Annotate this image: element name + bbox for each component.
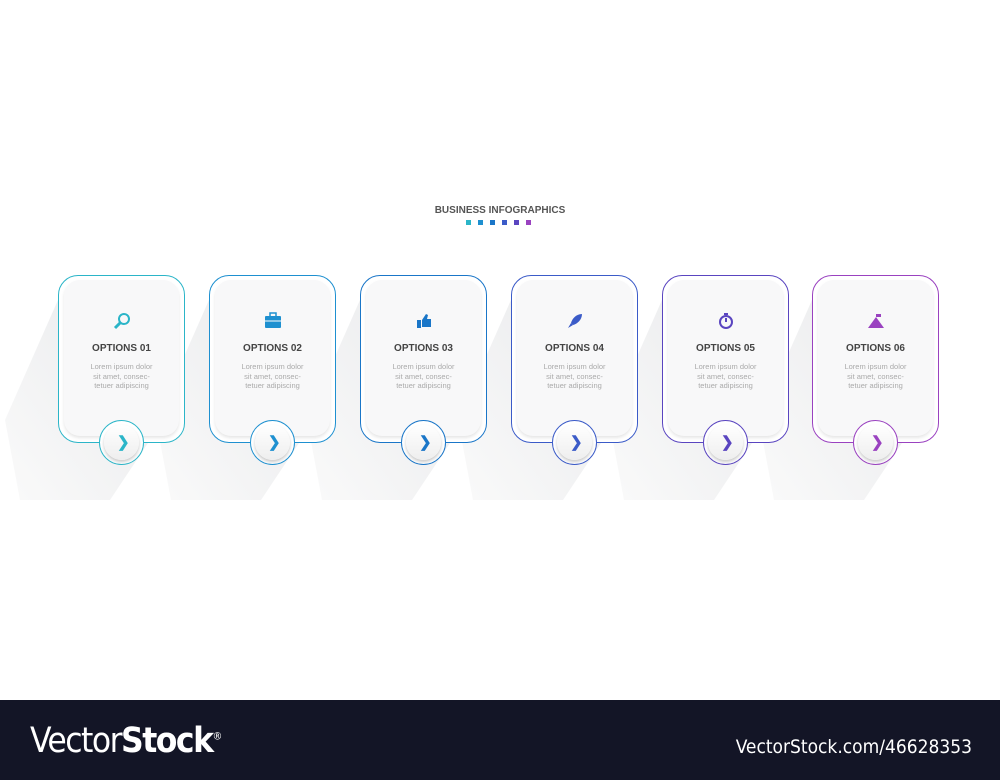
arrow circle 01 (99, 420, 144, 465)
footer logo: VectorStock® (30, 721, 221, 761)
text (844, 362, 907, 390)
heading: OPTIONS 05 (696, 343, 755, 354)
text: Lorem ipsum dolor (844, 362, 907, 371)
text: Lorem ipsum dolor (694, 362, 757, 371)
arrow circle 01: ❯ (117, 434, 130, 451)
arrow circle 06 (853, 420, 898, 465)
text: tetuer adipiscing (698, 381, 753, 390)
icon: rocket (568, 314, 582, 328)
heading: OPTIONS 01 (92, 343, 151, 354)
heading: OPTIONS 04 (545, 343, 604, 354)
text: tetuer adipiscing (245, 381, 300, 390)
panel: option 03 (360, 275, 487, 443)
panel: option 01 (58, 275, 185, 443)
text (694, 362, 757, 390)
arrow circle 03: ❯ (419, 434, 432, 451)
panel: option 02 (209, 275, 336, 443)
text (90, 362, 153, 390)
title: BUSINESS INFOGRAPHICS (435, 205, 565, 216)
arrow circle 02: ❯ (268, 434, 281, 451)
text: sit amet, consec- (546, 372, 603, 380)
panel: option 06 (812, 275, 939, 443)
arrow circle 06: ❯ (871, 434, 884, 451)
text (392, 362, 455, 390)
text (241, 362, 304, 390)
text: Lorem ipsum dolor (392, 362, 455, 371)
arrow circle 04 (552, 420, 597, 465)
heading: OPTIONS 02 (243, 343, 302, 354)
arrow circle 05: ❯ (721, 434, 734, 451)
text: sit amet, consec- (847, 372, 904, 380)
title dots (466, 220, 531, 225)
panel: option 05 (662, 275, 789, 443)
icon: briefcase (265, 312, 281, 328)
arrow circle 04: ❯ (570, 434, 583, 451)
text (543, 362, 606, 390)
text: sit amet, consec- (244, 372, 301, 380)
text: sit amet, consec- (93, 372, 150, 380)
text: Lorem ipsum dolor (90, 362, 153, 371)
heading: OPTIONS 06 (846, 343, 905, 354)
icon: thumbs up (417, 314, 431, 328)
arrow circle 03 (401, 420, 446, 465)
panel: option 04 (511, 275, 638, 443)
icon: mountain flag (868, 314, 884, 328)
text: Lorem ipsum dolor (543, 362, 606, 371)
text: sit amet, consec- (697, 372, 754, 380)
icon: magnifier (114, 313, 130, 329)
footer bar (0, 700, 1000, 780)
text: tetuer adipiscing (396, 381, 451, 390)
text: tetuer adipiscing (547, 381, 602, 390)
arrow circle 05 (703, 420, 748, 465)
arrow circle 02 (250, 420, 295, 465)
text: sit amet, consec- (395, 372, 452, 380)
icon: stopwatch (719, 313, 733, 329)
text: tetuer adipiscing (848, 381, 903, 390)
text: tetuer adipiscing (94, 381, 149, 390)
heading: OPTIONS 03 (394, 343, 453, 354)
footer url: VectorStock.com/46628353 (736, 736, 972, 758)
text: Lorem ipsum dolor (241, 362, 304, 371)
